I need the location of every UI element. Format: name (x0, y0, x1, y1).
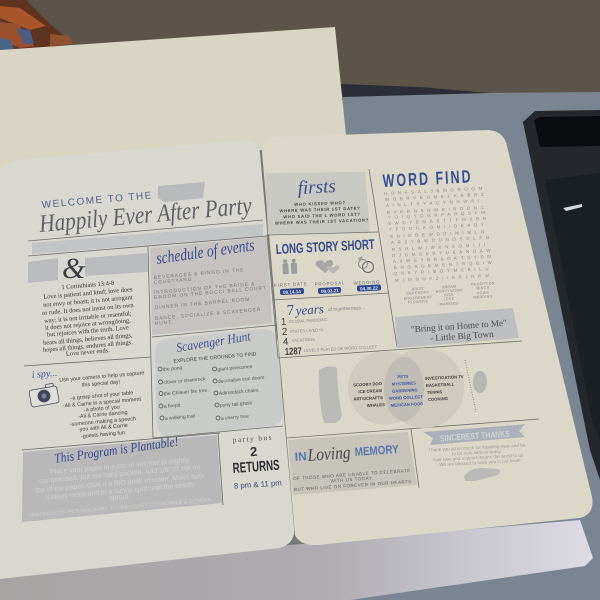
top rules and band (22, 220, 283, 505)
seven years: 1 (281, 317, 287, 328)
seven years: LEVELS PLAYED OF WORD COLLECT (304, 344, 378, 353)
schedule items: GROOM ON THE BOCCI BALL COURT (154, 285, 267, 301)
background: patterned fabric (0, 0, 75, 50)
firsts questions: WHO SAID THE L WORD 1ST? (283, 212, 361, 219)
i spy text (59, 370, 145, 440)
word list: KISS (444, 293, 454, 297)
dates: WEDDING (353, 279, 380, 286)
background: carpet (0, 0, 600, 100)
dates: PROPOSAL (315, 280, 345, 287)
word list: RINGS (476, 286, 490, 290)
dates: 04.30.22 (360, 286, 378, 291)
scavenger checklist (158, 364, 265, 422)
thank you text: Your love and support means the world to us (432, 453, 524, 462)
i spy text: -a group shot of your table (70, 390, 134, 402)
bible verse: not envy or boast; it is not arrogant (43, 294, 133, 309)
word search grid: ENGAGEMENTRQBIW (394, 260, 496, 270)
word search grid: ARZYBWDUNOSOLFN (391, 235, 493, 245)
memory text (293, 468, 412, 492)
laptop base (0, 520, 593, 600)
venn left list (353, 381, 385, 408)
plantable text: compressed, but not hard-packed. Add 1/8" of soil on (39, 464, 201, 485)
party bus: party bus (232, 433, 273, 444)
icon: rings (358, 256, 374, 272)
scavenger checklist: clover or shamrock (163, 376, 206, 386)
schedule items (154, 267, 267, 327)
schedule items: DANCE, SOCIALIZE & SCAVENGER (155, 307, 262, 322)
redaction blob: left (319, 366, 342, 423)
bible verse: it does not rejoice at wrongdoing, (45, 317, 131, 332)
bible verse: 1 Corinthians 13:4-8 (61, 280, 115, 291)
party bus: 2 (250, 444, 258, 459)
heading: welcome: WELCOME TO THE (41, 190, 152, 211)
thank you text (428, 442, 526, 467)
scavenger checklist: the pond (163, 365, 183, 373)
panel: plantable (22, 434, 222, 522)
redaction blob: right (473, 371, 487, 393)
word search grid: YOIQYDGNPARQSFM (388, 210, 488, 220)
song artist: - Little Big Town (430, 329, 494, 343)
word search grid: YFODGKOMIIDEADY (389, 222, 488, 232)
seven years: of togetherness... (328, 305, 365, 313)
word list: FLOWERS (408, 299, 428, 305)
scavenger checklist: a firepit (164, 403, 181, 410)
icon: camera (28, 383, 59, 407)
firsts title: firsts (297, 176, 336, 199)
scavenger checklist: pony tail grass (220, 400, 253, 409)
i spy text: -someone making a speech (70, 416, 136, 428)
word search grid: BVKRNSNWEIBGDNC (387, 205, 488, 215)
firsts questions (275, 200, 369, 226)
heading: word find: WORD FIND (382, 166, 473, 191)
i spy heading: i spy... (31, 368, 58, 381)
icon: couple (282, 259, 297, 274)
word search grid: HONFSALJBMGROOM (384, 186, 486, 196)
word list: DREAM (442, 285, 456, 289)
venn centre list: WORD COLLECT (389, 394, 424, 401)
bible verse: Love never ends. (66, 347, 110, 358)
background: carbon laptop surface (340, 92, 600, 600)
bible verse: Love is patient and kind; love does (43, 286, 133, 301)
thank you text: Thank you all so much for traveling near and far (428, 442, 526, 453)
venn centre list: MEXICAN FOOD (391, 401, 423, 408)
redacted names (28, 253, 148, 283)
schedule items: INTRODUCTION OF THE BRIDE & (154, 281, 256, 296)
heading: long story short: LONG STORY SHORT (275, 236, 375, 257)
venn left list: ARTS/CRAFTS (353, 395, 383, 402)
word search grid: AXWEYBRADKTSYDM (393, 254, 495, 264)
scavenger intro: EXPLORE THE GROUNDS TO FIND (173, 351, 257, 365)
firsts questions: WHO KISSED WHO? (294, 200, 346, 207)
party bus: 8 pm & 11 pm (234, 478, 282, 491)
panel: scavenger hunt (155, 328, 283, 436)
word search grid: BSHLWIWKNSOMIJI (392, 242, 489, 252)
ampersand: & (62, 252, 86, 285)
seven years: STATES LIVED IN (290, 327, 324, 334)
scavenger checklist: a walking trail (165, 413, 195, 422)
party bus (232, 433, 282, 491)
memory text: BUT WHO LIVE ON FOREVER IN OUR HEARTS (294, 479, 412, 492)
word search grid (384, 186, 496, 283)
seven years: 1287 (285, 346, 302, 358)
venn left list: WHALES (367, 402, 385, 408)
venn diagram (348, 348, 464, 428)
background: dark strip behind paper (340, 84, 490, 97)
word list: BRIDE (412, 287, 425, 291)
scavenger checklist: the Chilean fire tree (164, 388, 208, 397)
venn right list: TENNIS (427, 389, 443, 395)
sincerest thanks ribbon: SINCEREST THANKS (440, 429, 510, 443)
word list: LOVE (443, 297, 455, 301)
memory text: WITH US TODAY, (330, 476, 373, 483)
seven years: years (293, 301, 324, 318)
venn right list: BASKETBALL (426, 381, 455, 388)
memory text: OF THOSE WHO ARE UNABLE TO CELEBRATE (293, 468, 411, 481)
word search grid: MJMNGFZIIKKJNBW (395, 273, 493, 283)
venn centre list (389, 374, 424, 408)
bible verse: bears all things, believes all things, (43, 332, 133, 347)
bible verse (42, 280, 135, 358)
memory heading: IN (294, 449, 307, 464)
word list (404, 281, 495, 306)
venn centre list: GARDENING (392, 387, 418, 394)
i spy text: -Ali & Carrie in a special moment (63, 397, 142, 409)
panel: schedule of events (150, 235, 272, 335)
schedule heading: schedule of events (155, 235, 256, 268)
dates: 09.14.14 (283, 289, 301, 295)
thank you text: to be here with us today. (452, 449, 502, 456)
right card rules (267, 169, 539, 488)
word search grid: DJGMSERYUEANOAW (392, 248, 494, 258)
party bus: RETURNS (232, 458, 280, 477)
plantable text: Place your paper in a pot of soil that is slightly (50, 457, 190, 476)
scavenger checklist: a cherry tree (221, 414, 249, 422)
plantable text: top of the paper. Give it a BIG drink of water. Make sure (35, 473, 205, 494)
word search grid: SNIDDEWDDIMIMLG (390, 229, 488, 239)
memory heading (294, 442, 399, 465)
firsts questions: WHERE WAS THEIR 1ST DATE? (279, 206, 361, 213)
venn left list: ICE CREAM (358, 388, 383, 394)
schedule items: HUNT (155, 320, 172, 327)
word list: CEREMONY (406, 290, 430, 296)
redacted signature (464, 468, 500, 481)
i spy text: this special day! (82, 379, 121, 389)
scavenger checklist: decorative iron doors (218, 375, 265, 385)
venn right list (425, 374, 464, 402)
word search grid: QSKYRIMDYMCBILU (394, 266, 492, 276)
bible verse: or rude. It does not insist on its own (42, 302, 135, 317)
word list: ENGAGEMENT (404, 295, 433, 301)
plantable text: sprout. (109, 493, 131, 502)
panel: right program card (262, 130, 592, 545)
panel: left program card (0, 140, 294, 579)
venn centre list: MYSTERIES (392, 380, 416, 387)
plantable text: SNAPDRAGON PETUNIA DAISY THYME POPPY CHAMOMILE & OTHERS (28, 497, 212, 519)
panel: song quote (395, 308, 519, 348)
i spy text: -Ali & Carrie dancing (78, 410, 128, 420)
scavenger checklist: Adirondack chairs (219, 388, 259, 397)
redaction blob (158, 182, 205, 202)
word list: WEDDING (473, 294, 493, 300)
i spy text: -a photo of you (84, 404, 120, 414)
thank you text: We are blessed to have you in our lives! (439, 458, 521, 467)
seven years: GLOBAL PANDEMIC (289, 317, 328, 324)
seven years: 4 (283, 337, 289, 348)
schedule items: BEVERAGES & BINGO IN THE (154, 267, 245, 281)
panel: in loving memory (288, 432, 417, 495)
memory heading: MEMORY (354, 442, 399, 459)
venn right list: COOKING (428, 396, 448, 402)
schedule items: COURTYARD (154, 277, 193, 286)
word search grid: AINLTYYACYNHWSI (386, 198, 483, 208)
venn left list: SCOOBY DOO (353, 381, 383, 388)
scavenger checklist: giant pinecones (217, 364, 253, 373)
word list: MARRIED (440, 302, 458, 306)
scavenger heading: Scavenger Hunt (175, 328, 252, 355)
plantable text: it stays moist and in a sunny spot until the seeds (46, 482, 194, 501)
i spy text: -you with Ali & Carrie (78, 423, 128, 433)
bible verse: way; it is not irritable or resentful; (44, 310, 132, 325)
panel: firsts (265, 172, 370, 234)
word search grid: SWDYEMASTTFMXBH (388, 216, 490, 226)
i spy text: -guests having fun (81, 430, 125, 440)
sincerest thanks ribbon (423, 424, 525, 445)
back paper sheet (0, 27, 347, 200)
word list: HONEYMOON (436, 288, 462, 294)
plantable heading: This Program is Plantable! (53, 434, 179, 466)
firsts questions: WHERE WAS THEIR 1ST VACATION? (275, 217, 369, 226)
dates (274, 279, 381, 295)
dates: FIRST DATE (274, 281, 308, 288)
plantable text (28, 457, 212, 519)
memory heading: Loving (306, 442, 351, 465)
seven years (281, 301, 378, 358)
word list: VOWS (477, 291, 489, 295)
tablet (523, 110, 600, 480)
bible verse: but rejoices with the truth. Love (47, 324, 129, 339)
song text: "Bring it on Home to Me" (411, 318, 507, 334)
word list: RECEPTION (471, 281, 495, 287)
schedule items: DINNER IN THE BARREL ROOM (155, 297, 251, 311)
venn right list: INVESTIGATION TV (425, 374, 464, 381)
i spy text: Use your camera to help us capture (59, 370, 145, 384)
seven years: 7 (286, 303, 295, 319)
bible verse: hopes all things, endures all things. (43, 339, 133, 354)
word search grid: WOERVEOMEFKRBRZ (385, 192, 487, 202)
icon: hearts (315, 259, 340, 275)
seven years: 2 (282, 327, 288, 338)
venn centre list: PETS (397, 374, 409, 379)
dates: 09.03.21 (321, 288, 339, 294)
script title: Happily Ever After Party (37, 192, 253, 238)
seven years: VACATIONS (292, 337, 315, 343)
